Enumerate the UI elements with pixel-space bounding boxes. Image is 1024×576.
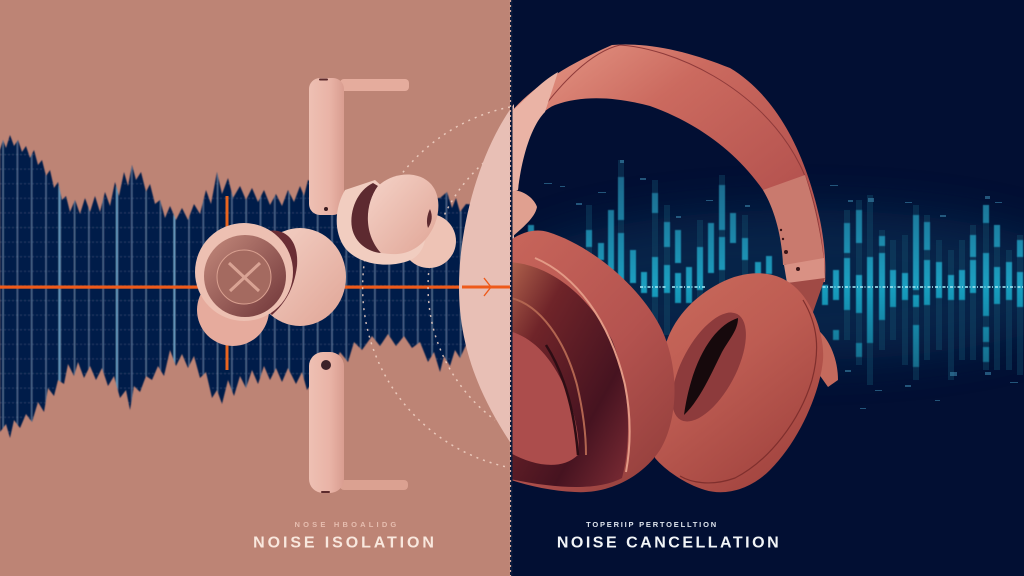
headband [511,44,825,282]
slider block [763,175,824,265]
divider: perforated center line [510,0,512,576]
sub-label left: NOSE HBOALIDG [295,520,399,529]
heading right: NOISE CANCELLATION [557,534,781,552]
icon: top earbud case stem [309,78,409,215]
left ear cup housing [505,262,628,487]
left ear cup plate [512,332,579,465]
chart: cyan noise waveform [500,160,1024,409]
chart: orange vertical marker [226,196,228,370]
headband yoke [511,190,537,238]
chart: orange signal line [0,286,510,289]
left ear cup [505,230,675,492]
text block: noise cancellation labels [557,520,781,552]
dotted arc: inner [428,150,500,420]
right ear cup opening [673,312,746,422]
chart: cyan center signal line [640,286,1024,288]
panel: noise isolation background [0,0,510,576]
panel: noise cancellation background [510,0,1024,576]
right ear cup [653,273,823,492]
icon: small earbud [337,174,456,268]
side button [820,332,838,387]
sub-label right: TOPERIIP PERTOELLTION [586,520,718,529]
text block: noise isolation labels [253,520,437,552]
chart: dark noise waveform [0,130,480,450]
dotted arc: outer [363,107,510,467]
panel: pale circle overlay [459,104,514,448]
icon: X mark [229,263,260,291]
icon: large earbud with X [195,223,346,346]
heading left: NOISE ISOLATION [253,534,437,552]
illustration: over-ear headphones [505,44,838,492]
arrow: orange [462,278,510,296]
icon: bottom earbud case stem [309,352,408,493]
